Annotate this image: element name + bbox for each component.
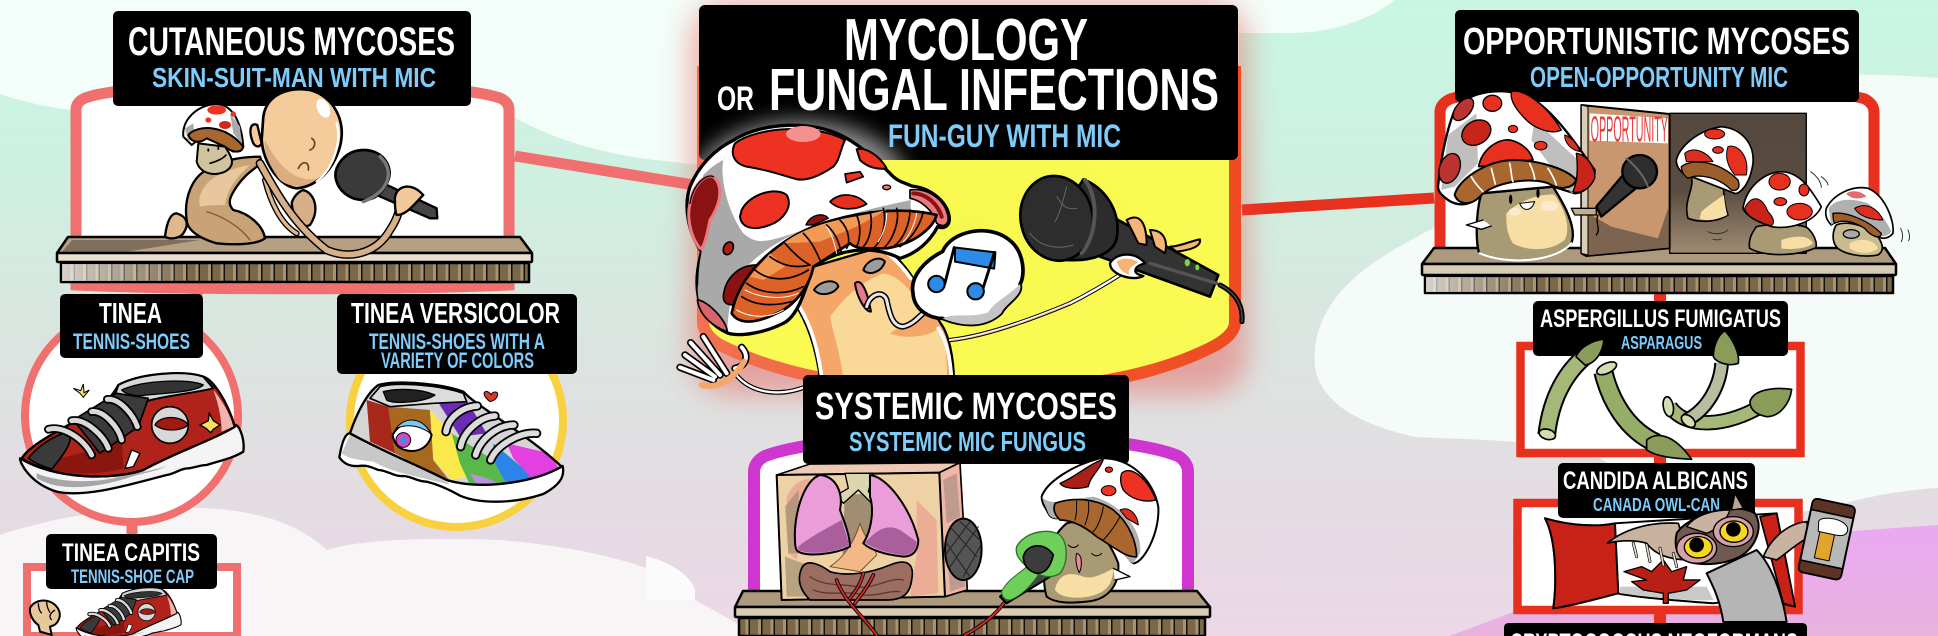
panel: main mycology frame [703,72,1235,391]
label [113,11,471,106]
capitis label: TENNIS-SHOE CAP [71,567,194,588]
title text: OR [717,80,754,118]
systemic label [803,375,1129,464]
aspergillus label: ASPARAGUS [1621,333,1702,353]
icon: rainbow tennis shoe [339,383,563,502]
panel: opportunistic mycoses [1422,10,1910,293]
mushroom leaving 2 [1743,172,1821,255]
song breath squiggle [867,294,928,327]
face [814,259,885,312]
organ cube mic [777,458,1158,635]
panel: aspergillus fumigatus [1520,301,1800,459]
versicolor label: VARIETY OF COLORS [381,348,534,373]
aspergillus label [1533,301,1788,356]
frame [27,567,237,636]
dark doorway [1670,113,1806,253]
microphone and right arm [950,169,1242,341]
candida label: CANADA OWL-CAN [1593,495,1720,515]
cryptococcus neoformans label [1504,623,1807,636]
sick mushroom [1042,458,1158,603]
systemic label: SYSTEMIC MIC FUNGUS [849,426,1086,457]
candida label: CANDIDA ALBICANS [1563,467,1748,495]
owl wings [1607,523,1690,560]
main mushroom character [680,125,1242,392]
big mushroom cap [1435,91,1595,204]
cleaver [1707,550,1787,622]
title text [717,7,1219,123]
frame [1518,503,1798,610]
lungs [795,475,850,554]
frame [1520,346,1800,453]
opportunistic label: OPEN-OPPORTUNITY MIC [1530,62,1788,94]
mushroom leaving 3 [1826,188,1893,256]
icon: asparagus spears [1538,331,1792,459]
opportunity door scene: OPPORTUNITY [1591,108,1668,149]
hand-held mic [335,150,437,218]
frame [1440,85,1874,280]
capitis label [46,534,217,589]
opportunistic label [1455,10,1859,102]
panel: tinea capitis [27,534,237,636]
mushroom stem [794,247,954,383]
tinea label: TENNIS-SHOES [73,329,190,354]
mushroom cap [687,125,949,335]
systemic label: SYSTEMIC MYCOSES [815,386,1117,428]
beer can [1798,498,1856,580]
candida label [1558,463,1755,518]
label: SKIN-SUIT-MAN WITH MIC [152,62,436,93]
flag [1545,513,1795,608]
sparkles [73,384,89,397]
Canadian flag, owl and can [1545,493,1856,622]
shelf [57,237,532,282]
panel: systemic mycoses [735,375,1210,636]
icon: red tennis shoe [20,373,244,493]
mnemonic: fun-guy with mic: FUN-GUY WITH MIC [888,118,1121,154]
main panel glow [690,0,1248,395]
label: CUTANEOUS MYCOSES [128,20,455,64]
aspergillus label: ASPERGILLUS FUMIGATUS [1540,305,1781,333]
mushroom leaving 1 [1676,127,1753,221]
connector lines [132,156,1660,625]
frame [76,83,509,289]
shelf [735,591,1210,636]
speaker grille [945,519,982,580]
door [1581,105,1670,256]
main title label [699,5,1238,160]
panel: cutaneous mycoses [57,11,532,289]
title text: FUNGAL INFECTIONS [769,57,1219,123]
panel: tinea circle [20,294,244,522]
skin-suit man with mic [165,89,437,254]
music note bubble [913,231,1023,325]
versicolor label: TINEA VERSICOLOR [351,298,560,330]
versicolor label: TENNIS-SHOES WITH A [369,329,545,354]
panel: tinea versicolor circle [337,294,577,527]
capitis label: TINEA CAPITIS [62,539,200,567]
intestines [799,562,912,600]
title text: MYCOLOGY [844,7,1088,73]
wires [837,573,1005,635]
big mushroom body [1466,187,1596,260]
owl head [1676,493,1759,564]
versicolor label [337,294,577,374]
panel: candida albicans [1518,463,1856,622]
opportunity door scene [1435,91,1910,260]
frame [754,435,1188,600]
slimy mic [1000,531,1066,603]
wiggle marks [1708,172,1910,242]
icon: shoe cap and fist [30,588,181,636]
circle [25,309,238,522]
shelf [1422,248,1896,293]
mushroom left arm and hand [680,337,822,392]
small microphone [1596,155,1657,235]
circle [350,314,563,527]
tinea label: TINEA [99,298,162,330]
tinea label [60,294,203,358]
heart [484,392,498,402]
little mushroom on back [183,104,243,174]
